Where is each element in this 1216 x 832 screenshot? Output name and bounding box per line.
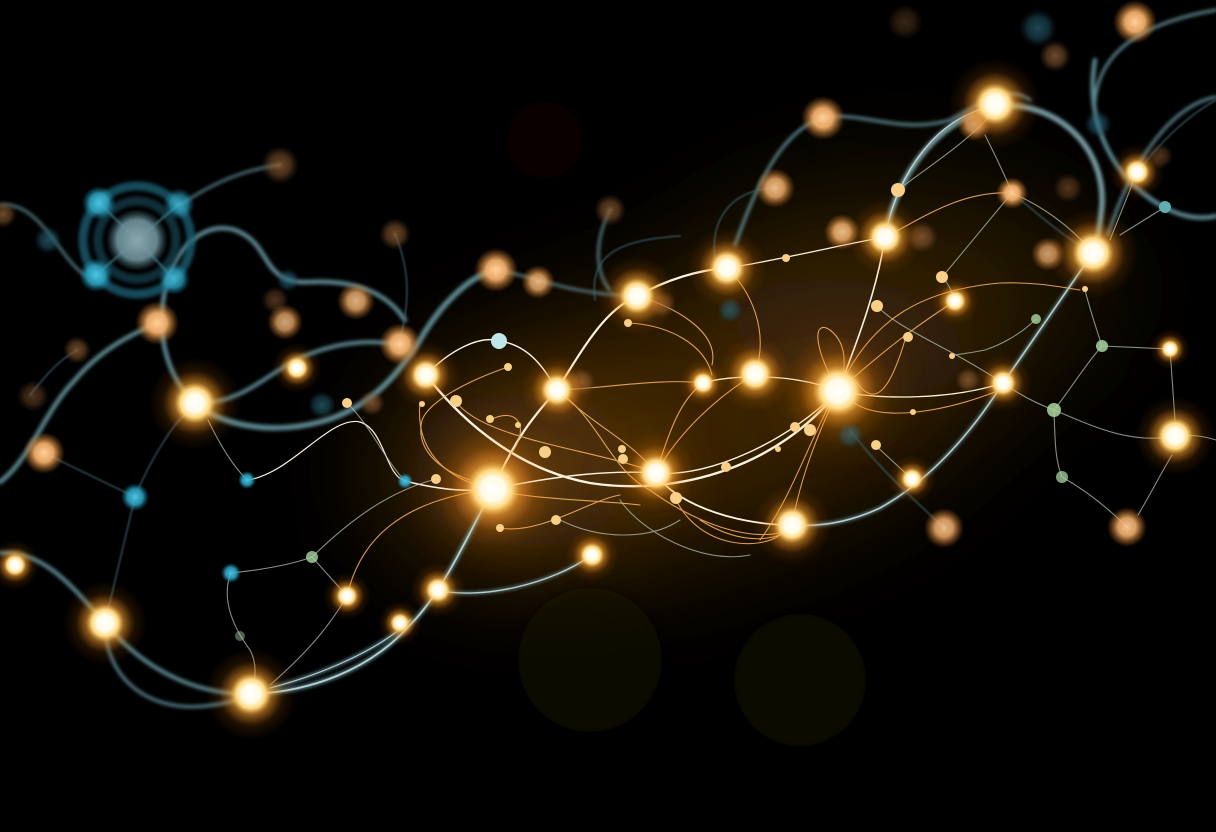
tiny junction nodes (342, 183, 1088, 532)
small green nodes (235, 314, 1108, 641)
cyan nodes (34, 9, 1171, 583)
soft orange nodes (23, 0, 1157, 548)
main white strands (247, 237, 1003, 525)
fine grey strands (208, 110, 1216, 694)
pale core lines over the teal strands (251, 108, 1093, 694)
dim background strands (30, 100, 1216, 610)
local orange halos around the main hubs (451, 353, 876, 531)
fine orange strands (347, 193, 1080, 596)
dim out-of-focus nodes (0, 4, 1173, 416)
warm background haze (367, 180, 1110, 619)
faint bokeh discs (507, 102, 866, 746)
hub icon: cyan ring (83, 186, 191, 294)
